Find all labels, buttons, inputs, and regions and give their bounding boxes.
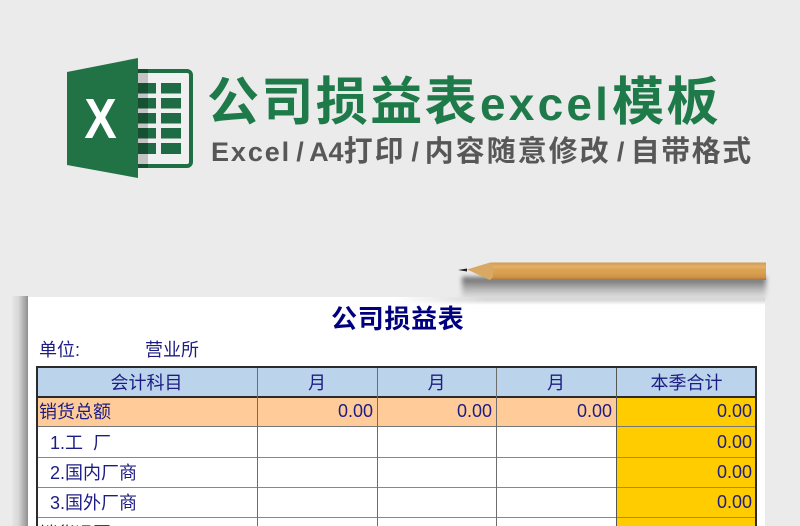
- panel: table: [36, 366, 757, 526]
- value total: [616, 427, 756, 457]
- subtitle: /: [617, 137, 624, 167]
- header: month 2: 月: [428, 373, 446, 393]
- value total: [616, 518, 756, 526]
- left edge shadow of sheet: [12, 296, 28, 526]
- value month 2: 0.00: [457, 401, 492, 421]
- icon: pencil: [458, 262, 766, 280]
- value total: 0.00: [717, 432, 752, 452]
- value month 3: 0.00: [577, 401, 612, 421]
- icon: Excel logo: [67, 58, 193, 178]
- header: month 1: 月: [308, 373, 326, 393]
- label: 销货总额: [39, 402, 111, 422]
- header: month 3: 月: [547, 373, 565, 393]
- value total: [616, 396, 756, 427]
- unit label: 单位: 营业所: [39, 340, 199, 360]
- value total: [616, 457, 756, 487]
- panel: spreadsheet sheet: [28, 297, 765, 526]
- title: 公司损益表excel模板: [207, 74, 721, 132]
- label: 1.工 厂: [50, 433, 111, 453]
- subtitle: /: [411, 137, 419, 167]
- sheet title: 公司损益表: [331, 304, 465, 334]
- header: account: 会计科目: [110, 373, 182, 393]
- row: domestic: [50, 458, 755, 487]
- header row: [36, 366, 757, 396]
- value total: [616, 487, 756, 518]
- row: total sales: [36, 396, 757, 427]
- pencil shadow on sheet: [414, 297, 765, 304]
- pencil shadow: [462, 277, 766, 301]
- header: quarter total: 本季合计: [650, 373, 722, 393]
- label: 2.国内厂商: [50, 463, 137, 483]
- value total: 0.00: [717, 401, 752, 421]
- row: sales returns: [39, 518, 755, 526]
- subtitle: Excel A4打印 内容随意修改 自带格式: [211, 136, 753, 168]
- icon: Excel logo: X: [84, 87, 117, 151]
- label: 3.国外厂商: [50, 493, 137, 513]
- value total: 0.00: [717, 462, 752, 482]
- value total: 0.00: [717, 492, 752, 512]
- subtitle: /: [296, 137, 304, 167]
- row: overseas: [50, 488, 755, 517]
- row: factory: [50, 427, 755, 457]
- value month 1: 0.00: [338, 401, 373, 421]
